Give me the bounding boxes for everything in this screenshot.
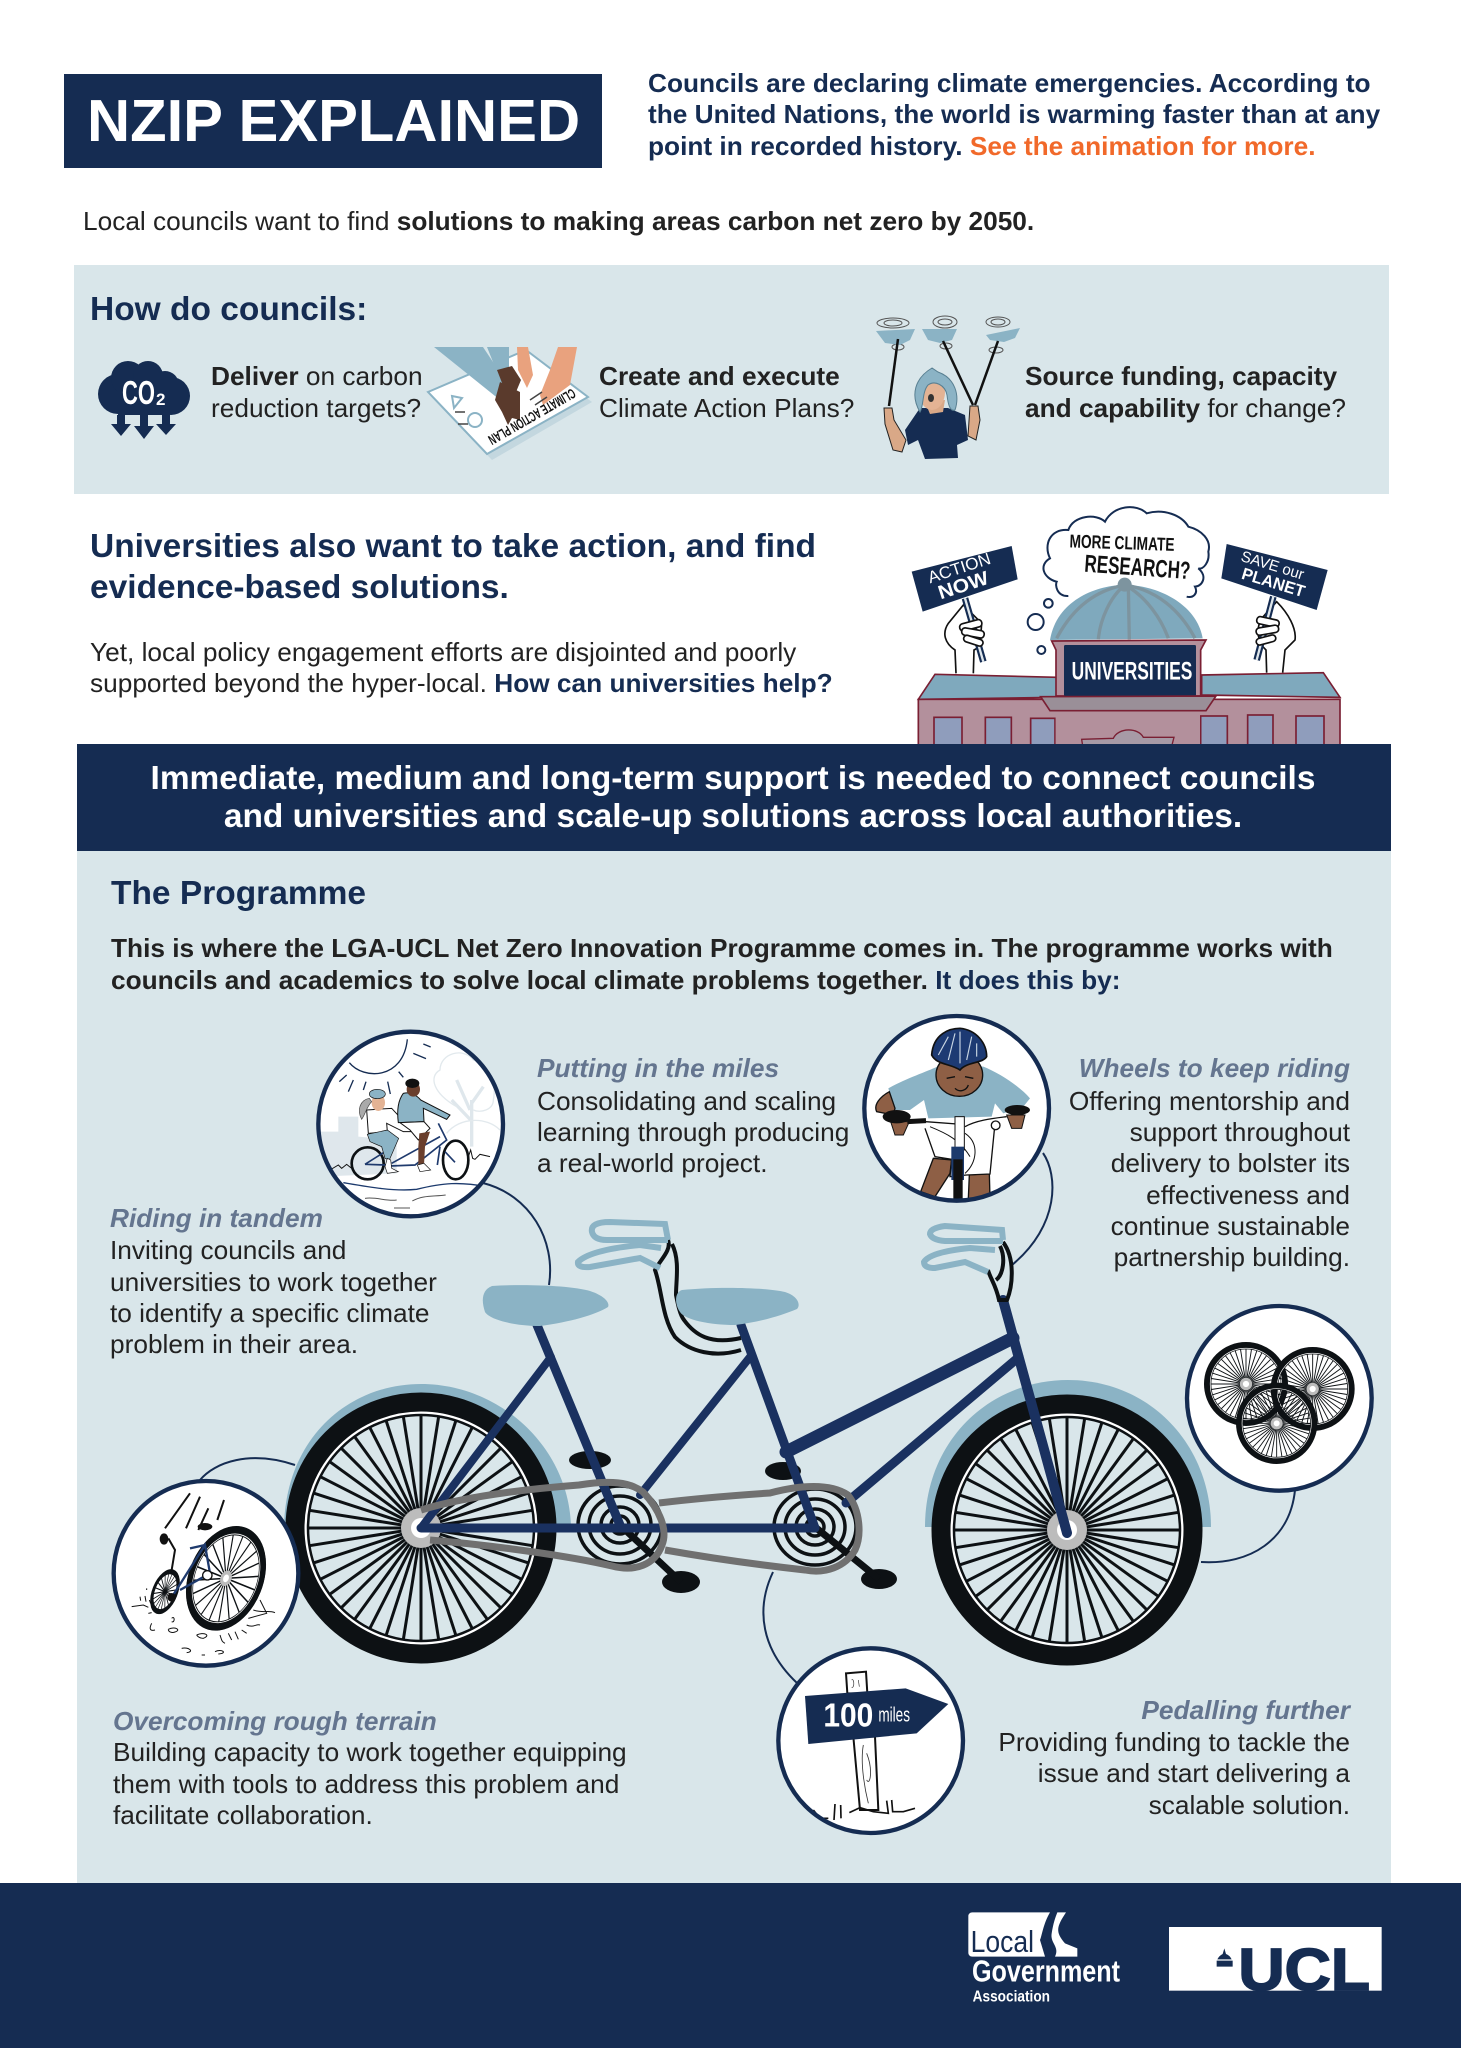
banner: immediate support: [77, 744, 1391, 851]
text: source funding: [1025, 361, 1346, 423]
logo: UCL: [1169, 1927, 1382, 2003]
icon circle: wheels to keep riding: [864, 1016, 1049, 1201]
text: create and execute: Create and execute: [599, 361, 840, 391]
text: create and execute: Climate Action Plans?: [599, 393, 854, 423]
text: overcoming rough terrain: them with tools to address this problem and: [113, 1769, 619, 1799]
thought cloud: RESEARCH?: [1084, 551, 1191, 585]
text: deliver: reduction targets?: [211, 393, 421, 423]
logo: local government association: [968, 1912, 1120, 2006]
text: wheels to keep riding: Offering mentorship and: [1069, 1086, 1350, 1116]
title banner: [64, 74, 602, 168]
logo: UCL: UCL: [1238, 1936, 1370, 2003]
text: putting in the miles: a real-world project.: [537, 1148, 768, 1178]
left sign: action now: NOW: [936, 568, 992, 604]
text: riding in tandem: Inviting councils and: [110, 1235, 346, 1265]
text: putting in the miles: Putting in the miles: [537, 1053, 779, 1083]
text: pedalling further: [998, 1695, 1352, 1820]
text: pedalling further: issue and start delivering a: [1038, 1758, 1350, 1788]
illustration: university building with protest signs: UNIVERSITIES: [1072, 657, 1192, 685]
right sign: save our planet: PLANET: [1239, 564, 1307, 601]
logo: local government association: Government: [972, 1955, 1120, 1989]
text: local policy engagement: Yet, local policy engagement efforts are disjointed and poorly: [90, 637, 797, 667]
banner: immediate support: and universities and scale-up solutions across local authorities.: [224, 798, 1242, 835]
icon circle: pedalling further three wheels: [1187, 1306, 1372, 1491]
text: programme intro: councils and academics to solve local climate problems together. It does this by:: [111, 965, 1120, 995]
header statement: Councils are declaring climate emergencies. According to: [648, 68, 1371, 98]
header statement: the United Nations, the world is warming faster than at any: [648, 99, 1381, 129]
icon: CO2 cloud: CO: [122, 374, 155, 411]
gears: [578, 1486, 856, 1565]
banner: immediate support: Immediate, medium and long-term support is needed to connect councils: [151, 760, 1315, 797]
handlebars: [578, 1222, 1003, 1272]
front handlebar stem: [988, 1242, 1012, 1300]
heading: the programme: The Programme: [111, 875, 366, 912]
icon: person spinning plates: [876, 316, 1020, 459]
text: wheels to keep riding: delivery to bolster its: [1111, 1148, 1350, 1178]
pedals and cranks: [569, 1451, 897, 1593]
icon circle: pedalling further signpost: miles: [878, 1704, 910, 1727]
intro line: Local councils want to find solutions to making areas carbon net zero by 2050.: [83, 206, 1034, 236]
title banner: NZIP EXPLAINED: [87, 87, 580, 154]
text: local policy engagement: supported beyond the hyper-local. How can universities help?: [90, 668, 833, 698]
text: wheels to keep riding: effectiveness and: [1146, 1180, 1350, 1210]
heading: how do councils: How do councils:: [90, 291, 367, 328]
leader lines: [200, 1153, 1295, 1683]
panel: how do councils: [74, 265, 1389, 494]
text: riding in tandem: [110, 1203, 437, 1359]
text: riding in tandem: Riding in tandem: [110, 1203, 323, 1233]
text: deliver: Deliver on carbon: [211, 361, 423, 391]
rear handlebar stem: [655, 1240, 741, 1354]
left sign: action now: [912, 546, 1018, 673]
icon circle: pedalling further signpost: 100: [823, 1698, 873, 1735]
thought cloud: MORE CLIMATE: [1069, 530, 1175, 555]
heading: universities: Universities also want to take action, and find: [90, 528, 816, 565]
footer bar: [0, 1883, 1461, 2048]
heading: universities: [90, 528, 816, 606]
rear wheel: [291, 1398, 551, 1658]
text: wheels to keep riding: continue sustainable: [1111, 1211, 1350, 1241]
text: source funding: and capability for change?: [1025, 393, 1346, 423]
right sign: save our planet: SAVE our: [1239, 548, 1306, 583]
illustration: university building with protest signs: [912, 507, 1340, 750]
text: wheels to keep riding: support throughout: [1130, 1117, 1351, 1147]
saddles: [483, 1285, 799, 1326]
text: create and execute: [599, 361, 854, 423]
text: wheels to keep riding: [1069, 1053, 1351, 1272]
thought cloud: [1028, 507, 1209, 654]
text: overcoming rough terrain: facilitate collaboration.: [113, 1800, 373, 1830]
text: pedalling further: Pedalling further: [1141, 1695, 1352, 1725]
text: putting in the miles: learning through producing: [537, 1117, 849, 1147]
icon circle: overcoming rough terrain: [114, 1481, 298, 1666]
mudguards: [284, 1380, 1211, 1530]
text: programme intro: This is where the LGA-UCL Net Zero Innovation Programme comes in. The programme works with: [111, 933, 1333, 963]
text: putting in the miles: Consolidating and scaling: [537, 1086, 836, 1116]
text: deliver: [211, 361, 423, 423]
text: riding in tandem: universities to work together: [110, 1267, 437, 1297]
frame: [421, 1300, 1067, 1533]
text: overcoming rough terrain: Building capacity to work together equipping: [113, 1737, 627, 1767]
icon circle: riding in tandem: [318, 1032, 503, 1216]
header statement: point in recorded history. See the animation for more.: [648, 131, 1316, 161]
text: programme intro: [111, 933, 1333, 995]
text: wheels to keep riding: partnership building.: [1114, 1242, 1350, 1272]
text: riding in tandem: problem in their area.: [110, 1329, 358, 1359]
text: pedalling further: Providing funding to tackle the: [998, 1727, 1350, 1757]
chain: [421, 1482, 859, 1571]
text: putting in the miles: [537, 1053, 849, 1178]
heading: universities: evidence-based solutions.: [90, 569, 509, 606]
text: local policy engagement: [90, 637, 833, 698]
header statement: [648, 68, 1381, 161]
logo: local government association: Local: [971, 1925, 1034, 1959]
text: pedalling further: scalable solution.: [1149, 1790, 1350, 1820]
text: wheels to keep riding: Wheels to keep riding: [1079, 1053, 1350, 1083]
front wheel: [937, 1400, 1197, 1660]
text: overcoming rough terrain: [113, 1706, 627, 1830]
icon: CO2 cloud: 2: [156, 390, 165, 409]
panel: the programme: [77, 850, 1391, 1883]
icon: climate action plan sheet and hands: [428, 347, 592, 460]
icon: CO2 cloud: [98, 361, 190, 439]
illustration: tandem bicycle: [284, 1222, 1211, 1660]
text: source funding: Source funding, capacity: [1025, 361, 1338, 391]
logo: local government association: Association: [973, 1989, 1050, 2006]
icon circle: pedalling further signpost: [778, 1648, 963, 1833]
left sign: action now: ACTION: [925, 549, 993, 587]
right sign: save our planet: [1221, 544, 1328, 673]
text: riding in tandem: to identify a specific climate: [110, 1298, 430, 1328]
text: overcoming rough terrain: Overcoming rough terrain: [113, 1706, 437, 1736]
icon: climate action plan sheet and hands: CLIMATE ACTION PLAN: [486, 385, 578, 448]
